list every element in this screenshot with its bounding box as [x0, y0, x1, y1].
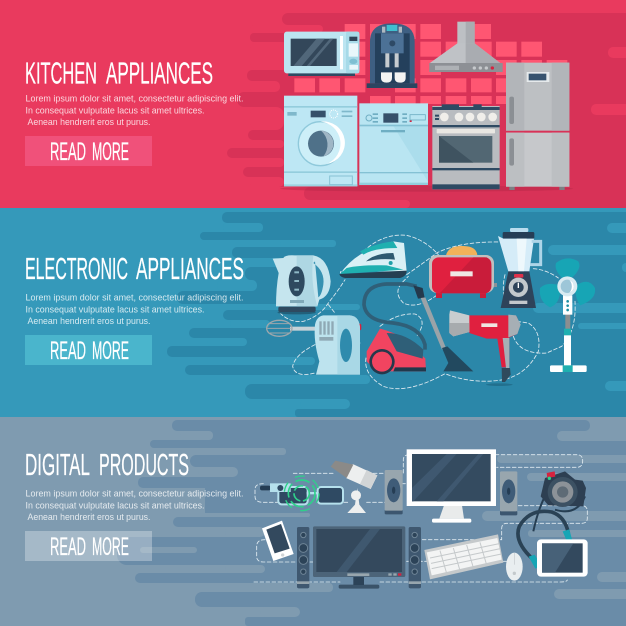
icon: whisk and hand mixer — [267, 315, 361, 375]
illustration: kitchen appliances — [280, 22, 573, 192]
icon: hair dryer — [449, 310, 521, 386]
panel: kitchen appliances banner — [0, 0, 626, 208]
heading: electronic appliances: APPLIANCES — [136, 251, 244, 286]
icon: speaker right — [500, 471, 517, 515]
icon: coffee machine — [367, 23, 417, 88]
icon: toaster — [429, 246, 497, 298]
icon: electric fan — [540, 258, 595, 372]
text block: electronic description — [26, 292, 244, 327]
icon: extractor hood — [429, 22, 503, 72]
icon: left tower speaker — [297, 527, 309, 588]
button: read more: MORE — [92, 337, 129, 365]
button: read more — [25, 335, 152, 365]
text block: digital description: Aenean hendrerit eros ut purus. — [28, 512, 150, 523]
text block: digital description: Lorem ipsum dolor sit amet, consectetur adipiscing elit. — [26, 488, 244, 500]
dashed connector lines — [254, 455, 587, 582]
text block: electronic description: Lorem ipsum dolor sit amet, consectetur adipiscing elit. — [26, 292, 244, 304]
icon: computer mouse — [506, 553, 523, 581]
button: read more: MORE — [92, 138, 129, 166]
text block: digital description: In consequat vulputate lacus sit amet ultrices. — [26, 500, 204, 512]
icon: oven — [432, 104, 500, 189]
icon: smartphone — [262, 521, 294, 561]
icon: right tower speaker — [409, 527, 421, 588]
heading: digital products: DIGITAL — [25, 447, 90, 482]
text block: kitchen description: In consequat vulputate lacus sit amet ultrices. — [26, 106, 204, 116]
icon: photo camera — [533, 471, 586, 531]
icon: blender — [498, 228, 541, 308]
icon: speaker — [385, 470, 403, 514]
icon: iron — [339, 241, 407, 278]
button: read more: MORE — [92, 533, 129, 561]
heading: kitchen appliances: APPLIANCES — [106, 56, 213, 90]
icon: washing machine — [284, 96, 357, 186]
button: read more: READ — [50, 337, 86, 365]
icon: fridge — [506, 63, 569, 190]
text block: kitchen description — [26, 94, 244, 128]
text block: electronic description: In consequat vulputate lacus sit amet ultrices. — [26, 304, 204, 316]
icon: security camera — [331, 461, 377, 513]
heading: digital products: PRODUCTS — [99, 447, 189, 482]
panel: electronic appliances banner — [0, 208, 626, 417]
text block: digital description — [26, 488, 244, 523]
icon: headphones — [518, 511, 573, 569]
illustration: electronic appliances — [267, 228, 595, 389]
illustration: digital products — [254, 449, 588, 589]
icon: microwave — [284, 32, 359, 76]
icon: 3d glasses and camera — [260, 476, 343, 511]
button: read more — [25, 531, 152, 561]
icon: dishwasher — [359, 103, 428, 185]
icon: vacuum cleaner — [364, 284, 473, 374]
button: read more — [25, 136, 152, 166]
icon: television with speakers — [313, 526, 405, 589]
heading: kitchen appliances: KITCHEN — [25, 56, 97, 90]
button: read more: READ — [50, 138, 86, 166]
text block: electronic description: Aenean hendrerit eros ut purus. — [28, 316, 150, 327]
text block: kitchen description: Aenean hendrerit eros ut purus. — [28, 117, 150, 128]
heading: electronic appliances: ELECTRONIC — [25, 251, 128, 286]
dashed connector lines — [280, 235, 575, 389]
icon: kettle — [273, 255, 331, 314]
icon: keyboard — [424, 534, 503, 579]
icon: tablet — [537, 539, 588, 577]
button: read more: READ — [50, 533, 86, 561]
panel: digital products banner — [0, 417, 626, 626]
text block: kitchen description: Lorem ipsum dolor sit amet, consectetur adipiscing elit. — [26, 94, 244, 104]
icon: desktop monitor — [407, 449, 496, 523]
